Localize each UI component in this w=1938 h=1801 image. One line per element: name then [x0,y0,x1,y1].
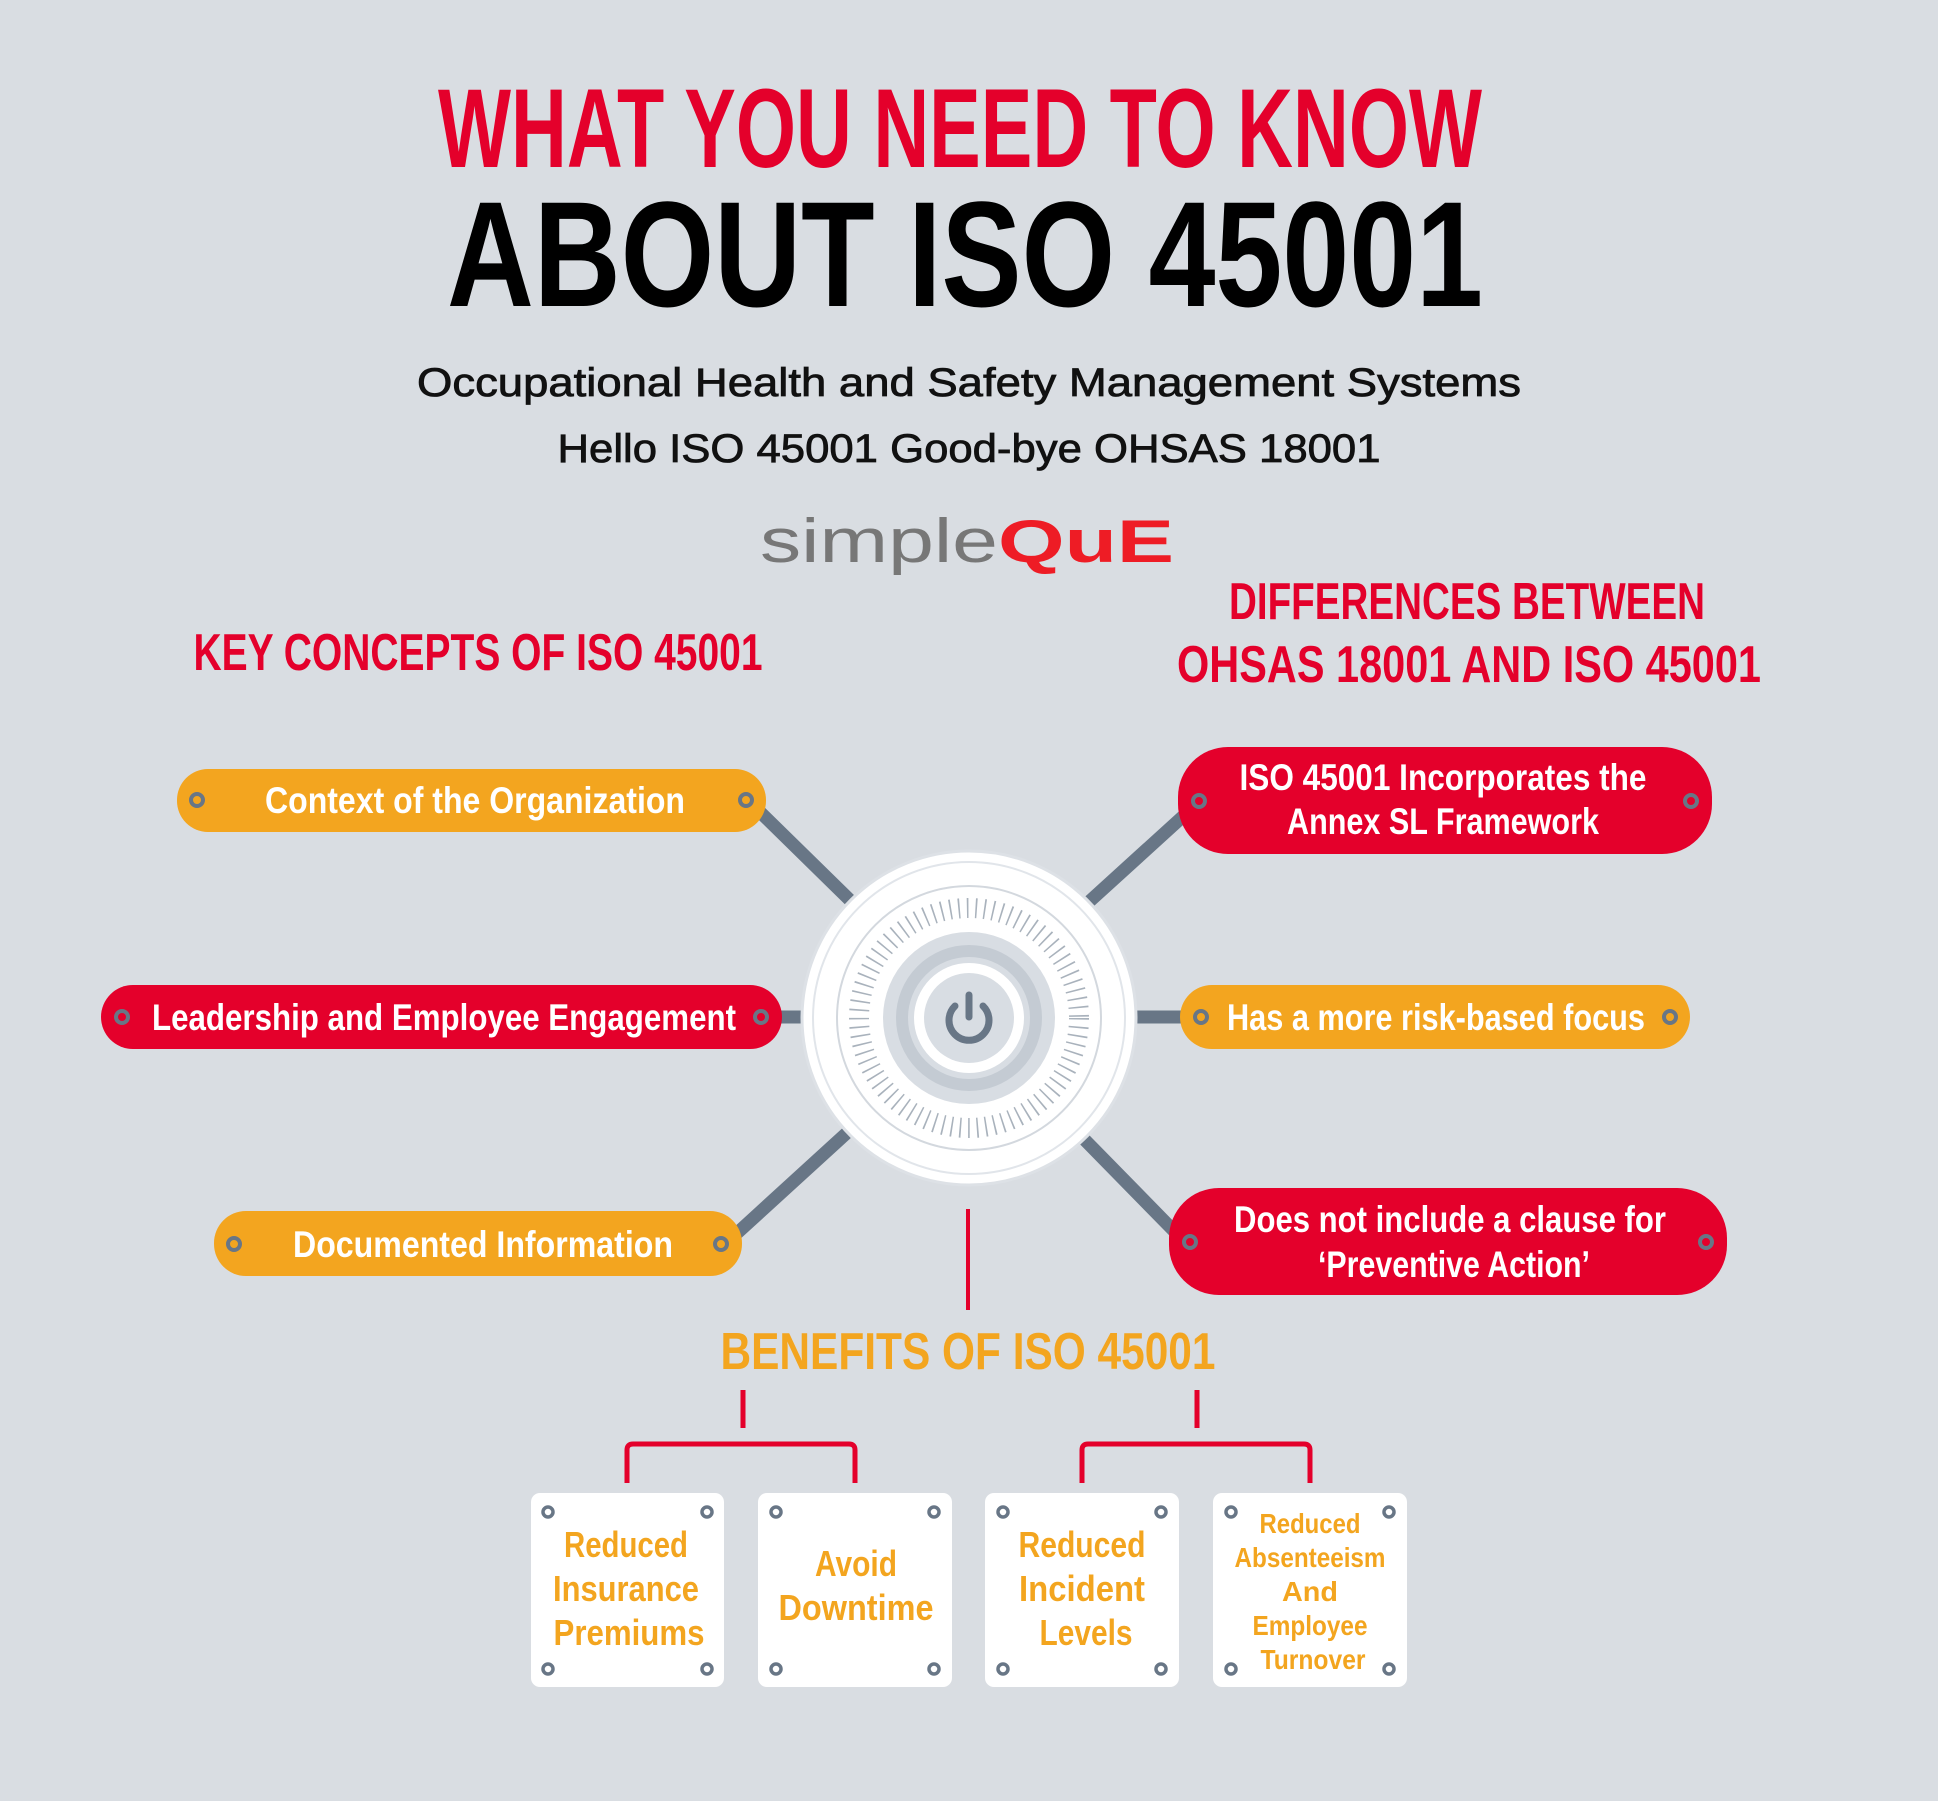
logo: simpleQuE: QuE [998,508,1174,575]
subtitle [417,361,1521,471]
box: Reduced Incident Levels: Reduced [1018,1524,1146,1565]
pill: Has a more risk-based focus: Has a more risk-based focus [1227,997,1645,1038]
center dial [802,851,1136,1185]
benefit brackets [627,1390,1310,1483]
pill: Leadership and Employee Engagement [101,985,782,1049]
pill: ISO 45001 Incorporates the Annex SL Framework [1178,747,1712,854]
subtitle: Occupational Health and Safety Management Systems [417,361,1521,405]
box: Avoid Downtime: Downtime [778,1587,934,1628]
title line 1: WHAT YOU NEED TO KNOW [438,66,1482,191]
pill: Context of the Organization: Context of the Organization [265,780,685,821]
logo: simpleQuE [760,507,1174,576]
pill: Leadership and Employee Engagement: Leadership and Employee Engagement [152,997,736,1038]
box: Reduced Incident Levels: Incident [1019,1568,1145,1609]
box: Reduced Absenteeism And Employee Turnover: Absenteeism [1234,1542,1386,1573]
pill: Has a more risk-based focus [1180,985,1690,1049]
heading: benefits: BENEFITS OF ISO 45001 [720,1323,1216,1381]
box: Reduced Insurance Premiums [531,1493,724,1687]
pill: ISO 45001 Incorporates the Annex SL Framework: Annex SL Framework [1287,801,1599,842]
box: Reduced Insurance Premiums: Premiums [554,1612,704,1653]
heading: differences: DIFFERENCES BETWEEN [1229,573,1705,631]
box: Reduced Absenteeism And Employee Turnover: Turnover [1260,1644,1366,1675]
pill: Does not include a clause for Preventive Action: ‘Preventive Action’ [1318,1244,1590,1285]
pill: Documented Information: Documented Information [293,1224,673,1265]
box: Reduced Absenteeism And Employee Turnover [1213,1493,1407,1687]
heading: differences [1177,573,1761,694]
box: Avoid Downtime [758,1493,952,1687]
red connector to benefits [966,1209,970,1310]
pill: ISO 45001 Incorporates the Annex SL Framework: ISO 45001 Incorporates the [1240,757,1646,798]
box: Reduced Absenteeism And Employee Turnover: And [1282,1576,1338,1607]
heading: differences: OHSAS 18001 AND ISO 45001 [1177,636,1761,694]
box: Reduced Incident Levels: Levels [1040,1612,1132,1653]
box: Reduced Absenteeism And Employee Turnover: Employee [1252,1610,1368,1641]
pill: Documented Information [214,1211,742,1276]
connector lines [735,810,1190,1235]
box: Reduced Insurance Premiums: Insurance [553,1568,699,1609]
subtitle: Hello ISO 45001 Good-bye OHSAS 18001 [558,427,1380,471]
pill: Does not include a clause for Preventive Action: Does not include a clause for [1234,1199,1666,1240]
box: Reduced Absenteeism And Employee Turnover: Reduced [1260,1508,1360,1539]
pill: Context of the Organization [177,769,766,832]
logo: simpleQuE: simple [760,507,998,576]
title line 2: ABOUT ISO 45001 [447,170,1483,338]
box: Reduced Incident Levels [985,1493,1179,1687]
heading: key concepts: KEY CONCEPTS OF ISO 45001 [194,624,762,682]
pill: Does not include a clause for Preventive Action [1169,1188,1727,1295]
box: Avoid Downtime: Avoid [815,1543,897,1584]
icon: power [949,995,989,1040]
box: Reduced Insurance Premiums: Reduced [564,1524,688,1565]
